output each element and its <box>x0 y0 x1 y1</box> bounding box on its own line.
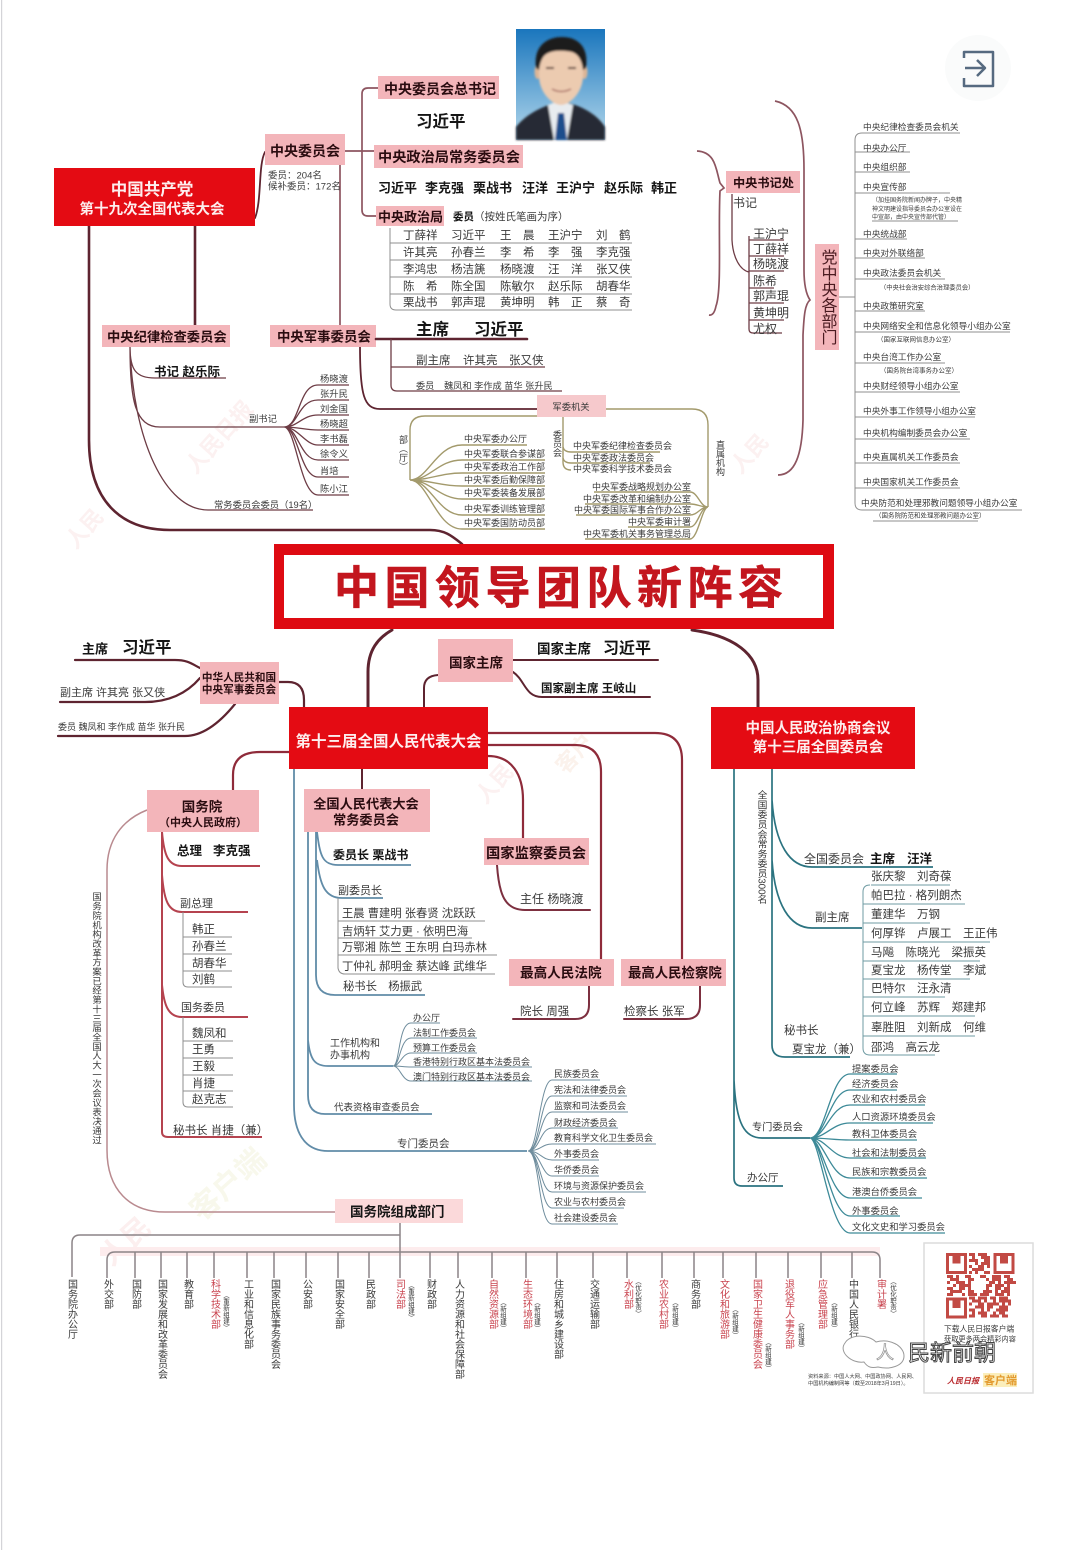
panel: 全国人大常委会: 监察和司法委员会 <box>554 1100 626 1111</box>
panel: 国务院: 肖捷 <box>192 1076 215 1090</box>
panel: 全国人大常委会: 代表资格审查委员会 <box>334 1101 420 1113</box>
panel: 军委机关 tree <box>398 395 725 539</box>
source note: 中国机构编制网等（截至2018年3月19日）。 <box>808 1379 909 1387</box>
panel: 中央政治局 members table: 赵乐际 <box>548 279 582 293</box>
panel: 中央政治局 members table: 胡春华 <box>596 279 630 293</box>
list: 党中央各部门 departments: 中央政策研究室 <box>863 300 924 311</box>
panel: 中央政治局 members table: 孙春兰 <box>451 246 486 259</box>
panel: 军委机关 tree: 中央军委联合参谋部 <box>464 448 545 459</box>
panel: 全国政协委员会: 副主席 <box>815 910 850 924</box>
panel: 第十三届全国人民代表大会 <box>289 707 488 769</box>
panel: 中央纪律检查委员会: 常务委员会委员（19名） <box>214 499 317 510</box>
panel: 国务院: 国务院机构改革方案已经第十三届全国人大一次会议表决通过 <box>91 892 102 1144</box>
panel: 中央军事委员会: 魏凤和 李作成 苗华 张升民 <box>444 380 553 391</box>
panel: 国务院组成部门: （新组建） <box>498 1299 507 1332</box>
panel: 中央纪律检查委员会 <box>102 325 349 510</box>
heading: 中央委员会总书记: 习近平 <box>416 112 466 131</box>
panel: 中国人民政治协商会议 <box>711 707 915 769</box>
panel: 全国政协委员会: 外事委员会 <box>852 1205 898 1216</box>
list: 党中央各部门 departments: 中央台湾工作办公室 <box>863 351 942 362</box>
panel: 中央政治局 members table: 李 强 <box>548 245 583 259</box>
panel: 最高人民检察院: 检察长 张军 <box>624 1004 685 1018</box>
panel: 全国人大常委会: 环境与资源保护委员会 <box>554 1180 644 1191</box>
faint watermarks: 人民 <box>95 1211 157 1272</box>
panel: 国务院组成部门: （新组建） <box>830 1299 838 1332</box>
panel: 国务院: 刘鹤 <box>192 972 215 986</box>
panel: 中央政治局 members table: 刘 鹤 <box>596 228 630 242</box>
panel: 中央书记处: 王沪宁 <box>753 226 789 241</box>
panel: 全国人大常委会: 专门委员会 <box>397 1137 450 1150</box>
panel: 全国人大常委会: 秘书长 杨振武 <box>343 979 422 993</box>
panel: 中央政治局 members table: 栗战书 <box>403 296 438 309</box>
list: 党中央各部门 departments: 中央办公厅 <box>863 142 907 153</box>
panel: 全国人大常委会: 万鄂湘 陈竺 王东明 白玛赤林 <box>342 940 487 954</box>
list: 党中央各部门 departments: 中央纪律检查委员会机关 <box>863 121 959 132</box>
panel: 国务院组成部门: （优化职责） <box>634 1278 642 1317</box>
faint watermarks: 客户 <box>551 729 599 778</box>
panel: 全国人大常委会: 澳门特别行政区基本法委员会 <box>413 1071 530 1082</box>
panel: 全国政协委员会: 邵鸿 高云龙 <box>871 1040 940 1054</box>
panel: 国务院组成部门: （新组建） <box>670 1299 679 1332</box>
panel: 中央纪律检查委员会: 肖培 <box>320 465 339 476</box>
panel: 中央政治局 members table: 黄坤明 <box>500 295 534 309</box>
panel: 全国政协委员会: 夏宝龙 杨传堂 李斌 <box>871 963 986 977</box>
QR code card: 人民日报 <box>947 1376 980 1385</box>
panel: 中央政治局常务委员会: 汪洋 <box>522 180 548 195</box>
panel: 中央政治局常务委员会: 李克强 <box>425 180 464 195</box>
panel: 中华人民共和国中央军事委员会: 主席 <box>82 641 108 656</box>
panel: 国务院组成部门: 农业农村部 <box>656 1278 668 1330</box>
panel: 全国人大常委会: 副委员长 <box>338 884 382 897</box>
panel: 国家监察委员会 <box>484 838 590 910</box>
list: 党中央各部门 departments: （中央社会治安综合治理委员会） <box>880 282 974 291</box>
panel: 最高人民检察院: 最高人民检察院 <box>628 964 722 980</box>
panel: 全国政协委员会: 教科卫体委员会 <box>852 1128 917 1139</box>
panel: 中华人民共和国中央军事委员会 <box>58 638 304 736</box>
list: 党中央各部门 departments: 中央国家机关工作委员会 <box>863 476 959 487</box>
panel: 全国人大常委会: 华侨委员会 <box>554 1164 599 1175</box>
panel: 中央纪律检查委员会: 张升民 <box>320 389 348 399</box>
panel: 全国人大常委会: 办公厅 <box>413 1012 440 1023</box>
panel: 中华人民共和国中央军事委员会: 副主席 许其亮 张又侠 <box>60 685 165 699</box>
panel: 全国人大常委会: 社会建设委员会 <box>554 1212 617 1223</box>
QR code card: 客户端 <box>984 1373 1017 1387</box>
panel: 军委机关 tree: 中央军委改革和编制办公室 <box>583 493 691 504</box>
icon: QR code <box>947 1254 1016 1317</box>
panel: 全国人大常委会: 委员长 栗战书 <box>333 847 408 862</box>
panel: 国务院组成部门: 国务院组成部门 <box>350 1203 444 1219</box>
panel: 国务院: 赵克志 <box>192 1092 226 1106</box>
panel: 全国人大常委会: 吉炳轩 艾力更 · 依明巴海 <box>342 924 468 938</box>
panel: 国家监察委员会: 主任 杨晓渡 <box>520 891 583 906</box>
list: 党中央各部门 departments: 中宣部，由中央宣传部代管） <box>872 213 950 221</box>
panel: 中央政治局常务委员会: 栗战书 <box>473 180 512 195</box>
list: 党中央各部门 departments: 中央网络安全和信息化领导小组办公室 <box>863 320 1011 331</box>
panel: 国家主席: 国家副主席 王岐山 <box>541 681 636 695</box>
panel: 国务院组成部门: （新组建） <box>796 1319 805 1352</box>
panel: 中央政治局 members table: 郭声琨 <box>451 295 486 309</box>
panel: 国务院组成部门: 生态环境部 <box>520 1278 532 1330</box>
panel: 中央书记处: 郭声琨 <box>753 289 789 303</box>
panel: 中央委员会 <box>265 134 345 192</box>
panel: 军委机关 tree: 委员会 <box>552 429 562 458</box>
panel: 国务院组成部门: （重新组建） <box>406 1282 415 1321</box>
panel: 国务院组成部门: 国家民族事务委员会 <box>268 1279 280 1370</box>
panel: 国务院组成部门: （新组建） <box>730 1306 739 1338</box>
panel: 中华人民共和国中央军事委员会: 中华人民共和国 <box>202 671 276 684</box>
panel: 国家主席: 国家主席 <box>537 640 591 656</box>
panel: 中央政治局 members table: 杨晓渡 <box>500 262 535 276</box>
source note: 资料来源：中国人大网、中国政协网、人民网、 <box>808 1372 917 1380</box>
panel: 国务院组成部门: （重新组建） <box>222 1292 230 1331</box>
panel: 国务院组成部门: 国务院办公厅 <box>66 1279 78 1339</box>
panel: 中央纪律检查委员会: 书记 赵乐际 <box>154 364 220 379</box>
title banner <box>274 544 834 629</box>
panel: 中央政治局 members table: 蔡 奇 <box>596 296 630 309</box>
panel: 中央政治局 members table: 陈全国 <box>451 279 486 293</box>
brace: 党中央各部门 <box>775 101 810 475</box>
panel: 中央政治局 members table <box>376 206 632 310</box>
panel: 全国政协委员会: 文化文史和学习委员会 <box>852 1221 945 1232</box>
panel: 中华人民共和国中央军事委员会: 中央军事委员会 <box>202 683 276 696</box>
panel: 全国人大常委会: 丁仲礼 郝明金 蔡达峰 武维华 <box>342 959 487 973</box>
panel: 国务院: 国务委员 <box>181 1001 225 1014</box>
panel: 国务院组成部门: （新组建） <box>764 1339 772 1372</box>
panel: 国务院: 孙春兰 <box>192 940 226 953</box>
panel: 中央政治局 members table: 李鸿忠 <box>403 262 438 276</box>
panel: 中央军事委员会: 中央军事委员会 <box>277 328 371 344</box>
panel: 军委机关 tree: 中央军委政法委员会 <box>573 452 654 463</box>
panel: 中华人民共和国中央军事委员会: 习近平 <box>122 638 172 657</box>
faint watermarks: 人民 <box>471 759 519 808</box>
panel: 国务院 <box>91 790 335 1212</box>
panel: 中央纪律检查委员会: 中央纪律检查委员会 <box>107 328 227 344</box>
QR code card: 获取更多两会精彩内容 <box>944 1334 1016 1343</box>
panel: 国务院组成部门 <box>66 1199 897 1380</box>
panel: 中央政治局 members table: 陈敏尔 <box>500 279 534 293</box>
panel: 国家主席: 国家主席 <box>449 654 503 670</box>
panel: 全国人大常委会: 工作机构和 <box>330 1036 380 1049</box>
panel: 军委机关 tree: 部（厅） <box>398 434 408 471</box>
panel: 国家监察委员会: 国家监察委员会 <box>486 844 586 862</box>
panel: 国务院组成部门: 住房和城乡建设部 <box>552 1278 564 1360</box>
panel: 国务院组成部门: （优化职责） <box>888 1278 897 1317</box>
source note <box>808 1372 917 1387</box>
heading: 中央委员会总书记: 中央委员会总书记 <box>384 81 496 97</box>
panel: 全国政协委员会: 马飚 陈晓光 梁振英 <box>871 945 986 959</box>
panel: 中央政治局 members table: 丁薛祥 <box>403 228 438 242</box>
list: 党中央各部门 departments: 中央对外联络部 <box>863 247 924 258</box>
panel: 军委机关 tree: 中央军委国防动员部 <box>464 517 545 528</box>
list: 党中央各部门 departments: 中央直属机关工作委员会 <box>863 451 959 462</box>
panel: 军委机关 tree: 直属机构 <box>715 439 725 477</box>
panel: 全国政协委员会: 夏宝龙（兼） <box>792 1042 861 1056</box>
panel: 国务院组成部门: 中国人民银行 <box>846 1278 858 1340</box>
panel: 中央军事委员会: 许其亮 <box>463 353 498 367</box>
list: 党中央各部门 departments: 中央外事工作领导小组办公室 <box>863 405 976 416</box>
panel: 中央纪律检查委员会: 李书磊 <box>320 433 348 444</box>
panel: 国务院: 韩正 <box>192 922 215 936</box>
panel: 全国人大常委会: 常务委员会 <box>333 811 399 827</box>
panel: 全国人大常委会: 外事委员会 <box>554 1148 599 1159</box>
panel: 国务院: 胡春华 <box>192 956 226 970</box>
panel: 党中央各部门 <box>815 244 839 350</box>
panel: 国务院组成部门: 交通运输部 <box>588 1278 600 1330</box>
panel: 全国政协委员会: 专门委员会 <box>752 1120 803 1133</box>
panel: 全国政协委员会: 经济委员会 <box>852 1078 898 1089</box>
list: 党中央各部门 departments: 中央宣传部 <box>863 181 907 192</box>
panel: 最高人民法院: 最高人民法院 <box>520 964 602 980</box>
panel: 军委机关 tree: 中央军委办公厅 <box>464 433 527 444</box>
panel: 国务院组成部门: 国家安全部 <box>332 1279 344 1330</box>
panel: 军委机关 tree: 中央军委科学技术委员会 <box>573 463 672 474</box>
panel: 全国人大常委会 <box>294 769 656 1224</box>
panel: 国务院组成部门: 财政部 <box>424 1278 436 1310</box>
panel: 国务院组成部门: （新组建） <box>532 1299 541 1332</box>
panel: 中央军事委员会: 委员 <box>416 380 434 391</box>
panel: 全国政协委员会: 汪洋 <box>907 851 933 866</box>
panel: 全国人大常委会: 民族委员会 <box>554 1068 599 1079</box>
panel: 中央政治局 members table: （按姓氏笔画为序） <box>474 210 568 223</box>
panel: 中央委员会: 委员：204名 <box>268 169 322 181</box>
panel: 全国人大常委会: 办事机构 <box>330 1048 370 1061</box>
panel: 国务院组成部门: 水利部 <box>622 1279 634 1310</box>
list: 党中央各部门 departments: 神文明建设指导委员会办公室设在 <box>872 205 962 213</box>
panel: 国务院组成部门: 科学技术部 <box>208 1278 220 1330</box>
panel: 全国政协委员会: 港澳台侨委员会 <box>852 1186 917 1197</box>
panel: 中央政治局常务委员会: 中央政治局常务委员会 <box>378 149 520 166</box>
panel: 中央政治局 members table: 中央政治局 <box>378 209 443 224</box>
panel: 国务院组成部门: 工业和信息化部 <box>242 1279 254 1350</box>
WeChat account watermark: 人 <box>876 1343 894 1363</box>
panel: 中央政治局 members table: 韩 正 <box>548 295 582 309</box>
panel: 全国政协委员会: 民族和宗教委员会 <box>852 1166 926 1177</box>
WeChat account watermark <box>843 1336 996 1368</box>
panel: 国务院组成部门: 民政部 <box>364 1279 376 1310</box>
panel: 中央政治局 members table: 许其亮 <box>403 245 438 259</box>
panel: 国务院: 秘书长 肖捷（兼） <box>173 1123 268 1137</box>
panel: 全国政协委员会: 办公厅 <box>747 1171 778 1184</box>
faint watermarks: 人民 <box>61 504 109 553</box>
panel: 军委机关 tree: 军委机关 <box>552 401 590 412</box>
panel: 最高人民法院 <box>509 959 614 1019</box>
panel: 国务院组成部门: 退役军人事务部 <box>782 1279 794 1350</box>
panel: 全国人大常委会: 香港特别行政区基本法委员会 <box>413 1056 530 1067</box>
QR code card: 下载人民日报客户端 <box>944 1323 1014 1333</box>
panel: 中央纪律检查委员会: 陈小江 <box>320 483 348 494</box>
panel: 中央纪律检查委员会: 杨晓渡 <box>320 373 348 384</box>
panel: 中央书记处: 尤权 <box>753 322 777 336</box>
portrait photo <box>516 29 605 140</box>
panel: 国务院组成部门: 国家发展和改革委员会 <box>156 1279 168 1380</box>
panel: 中央政治局 members table: 习近平 <box>451 229 486 242</box>
panel: 全国政协委员会: 提案委员会 <box>852 1063 898 1074</box>
panel: 全国政协委员会: 何厚铧 卢展工 王正伟 <box>871 926 998 940</box>
panel: 国务院: 副总理 <box>180 896 213 910</box>
panel: 中央政治局 members table: 李克强 <box>596 245 631 259</box>
panel: 国务院: 李克强 <box>213 843 251 858</box>
panel: 军委机关 tree: 中央军委训练管理部 <box>464 503 545 514</box>
panel: 全国人大常委会: 预算工作委员会 <box>413 1042 476 1053</box>
list: 党中央各部门 departments <box>839 121 1022 521</box>
panel: 全国政协委员会: 农业和农村委员会 <box>852 1093 926 1104</box>
panel: 国务院组成部门: 司法部 <box>394 1279 406 1310</box>
connectors: 全国人大 branches <box>233 733 682 959</box>
panel: 中国共产党第十九次全国代表大会: 中国共产党 <box>111 180 193 199</box>
panel: 全国政协委员会 <box>734 769 998 1233</box>
panel: 全国政协委员会: 巴特尔 汪永清 <box>871 981 952 995</box>
panel: 中央委员会: 候补委员：172名 <box>268 180 341 192</box>
panel: 中国共产党第十九次全国代表大会 <box>54 168 255 226</box>
panel: 全国政协委员会: 秘书长 <box>784 1023 819 1037</box>
faint watermarks <box>61 396 880 1272</box>
panel: 国务院组成部门: 应急管理部 <box>816 1278 828 1330</box>
panel: 全国人大常委会: 农业与农村委员会 <box>554 1196 626 1207</box>
panel: 中央政治局常务委员会: 韩正 <box>651 180 677 195</box>
panel: 中国共产党第十九次全国代表大会: 第十九次全国代表大会 <box>80 200 225 218</box>
panel: 国务院组成部门: 自然资源部 <box>486 1278 498 1330</box>
panel: 中央纪律检查委员会: 副书记 <box>249 413 277 424</box>
panel: 军委机关 tree: 中央军委政治工作部 <box>464 461 545 472</box>
panel: 党中央各部门: 党中央各部门 <box>818 249 838 346</box>
panel: 全国人大常委会: 王晨 曹建明 张春贤 沈跃跃 <box>342 906 476 920</box>
panel: 中央军事委员会: 习近平 <box>474 320 524 339</box>
panel: 中央政治局 members table: 张又侠 <box>596 263 631 276</box>
title banner: 中国领导团队新阵容 <box>334 562 789 613</box>
panel: 全国政协委员会: 董建华 万钢 <box>871 907 940 921</box>
panel: 中央军事委员会: 主席 <box>416 319 449 339</box>
list: 党中央各部门 departments: 中央防范和处理邪教问题领导小组办公室 <box>861 497 1018 508</box>
panel: 军委机关 tree: 中央军委国际军事合作办公室 <box>574 504 691 515</box>
panel: 中国人民政治协商会议: 中国人民政治协商会议 <box>746 719 891 737</box>
list: 党中央各部门 departments: 中央政法委员会机关 <box>863 267 942 278</box>
panel: 中央纪律检查委员会: 杨晓超 <box>320 418 348 429</box>
panel: 全国人大常委会: 教育科学文化卫生委员会 <box>554 1132 653 1143</box>
panel: 国务院: 王勇 <box>192 1043 215 1056</box>
panel: 中央政治局 members table: 李 希 <box>500 245 534 259</box>
panel: 国务院: 总理 <box>177 843 203 858</box>
panel: 国务院组成部门: 教育部 <box>182 1278 194 1310</box>
panel: 中国人民政治协商会议: 第十三届全国委员会 <box>753 738 884 756</box>
panel: 中央政治局 members table: 陈 希 <box>403 279 438 293</box>
list: 党中央各部门 departments: （国务院台湾事务办公室） <box>880 365 958 374</box>
QR code card <box>924 1243 1033 1393</box>
panel: 全国政协委员会: 何立峰 苏辉 郑建邦 <box>871 1000 986 1014</box>
list: 党中央各部门 departments: 中央机构编制委员会办公室 <box>863 427 968 438</box>
panel: 全国政协委员会: 张庆黎 刘奇葆 <box>871 869 952 883</box>
panel: 全国政协委员会: 全国委员会 <box>804 851 864 866</box>
panel: 中央政治局 members table: 汪 洋 <box>548 262 583 276</box>
panel: 全国人大常委会: 法制工作委员会 <box>413 1027 476 1038</box>
panel: 国务院组成部门: 国防部 <box>130 1279 142 1310</box>
panel: 中央政治局 members table: 杨洁篪 <box>451 262 486 276</box>
panel: 国务院: （中央人民政府） <box>159 815 247 829</box>
list: 党中央各部门 departments: 中央组织部 <box>863 161 907 172</box>
list: 党中央各部门 departments: （国务院防范和处理邪教问题办公室） <box>875 510 986 519</box>
panel: 中央政治局 members table: 王 晨 <box>500 229 535 242</box>
panel: 军委机关 tree: 中央军委审计署 <box>628 516 691 527</box>
panel: 国务院组成部门: 外交部 <box>102 1279 114 1310</box>
panel: 中央书记处 <box>726 171 800 336</box>
panel: 最高人民法院: 院长 周强 <box>520 1004 570 1018</box>
main connector lines <box>89 88 758 707</box>
panel: 全国政协委员会: 社会和法制委员会 <box>852 1147 926 1158</box>
panel: 国务院组成部门: 文化和旅游部 <box>718 1278 730 1340</box>
panel: 国家主席: 习近平 <box>603 639 651 657</box>
panel: 中央政治局常务委员会: 习近平 <box>378 180 417 195</box>
panel: 全国人大常委会: 全国人民代表大会 <box>313 795 419 811</box>
panel: 国务院组成部门: 人力资源和社会保障部 <box>452 1279 464 1380</box>
faint watermarks: 人民 <box>726 429 774 478</box>
panel: 中央纪律检查委员会: 徐令义 <box>320 448 348 459</box>
panel: 全国政协委员会: 全国委员会常务委员300名 <box>756 789 767 905</box>
heading: 中央委员会总书记 <box>378 76 499 131</box>
panel: 中央军事委员会 <box>270 319 562 409</box>
panel: 国务院: 王毅 <box>192 1059 215 1073</box>
panel: 中央委员会: 中央委员会 <box>270 143 340 159</box>
panel: 中央书记处: 黄坤明 <box>753 305 789 320</box>
panel: 国务院组成部门: 审计署 <box>874 1278 886 1309</box>
panel: 军委机关 tree: 中央军委纪律检查委员会 <box>573 440 672 451</box>
panel: 全国人大常委会: 财政经济委员会 <box>554 1117 617 1128</box>
faint watermarks: 人民日报 <box>181 396 258 478</box>
panel: 军委机关 tree: 中央军委装备发展部 <box>464 487 545 498</box>
panel: 中央政治局 members table: 王沪宁 <box>548 228 582 242</box>
panel: 中央书记处: 书记 <box>733 196 757 210</box>
panel: 全国政协委员会: 帕巴拉 · 格列朗杰 <box>871 888 962 902</box>
panel: 中央书记处: 中央书记处 <box>733 175 794 190</box>
panel: 中央政治局常务委员会 <box>374 145 677 195</box>
list: 党中央各部门 departments: （加挂国务院新闻办牌子，中央精 <box>872 196 962 204</box>
panel: 军委机关 tree: 中央军委机关事务管理总局 <box>583 528 691 539</box>
panel: 中央书记处: 丁薛祥 <box>753 242 789 256</box>
panel: 全国政协委员会: 辜胜阻 刘新成 何维 <box>871 1020 986 1034</box>
panel: 中华人民共和国中央军事委员会: 委员 魏凤和 李作成 苗华 张升民 <box>58 721 185 732</box>
WeChat account watermark: 民新前朝 <box>908 1340 996 1365</box>
list: 党中央各部门 departments: 中央财经领导小组办公室 <box>863 380 959 391</box>
panel: 中央书记处: 陈希 <box>753 273 777 288</box>
panel: 全国政协委员会: 主席 <box>870 851 895 866</box>
panel: 国务院: 国务院 <box>182 798 223 814</box>
panel: 中央政治局常务委员会: 王沪宁 <box>556 180 595 195</box>
panel: 中央书记处: 杨晓渡 <box>753 256 789 271</box>
panel: 军委机关 tree: 中央军委后勤保障部 <box>464 474 545 485</box>
panel: 军委机关 tree: 中央军委战略规划办公室 <box>592 481 691 492</box>
panel: 国务院组成部门: 国家卫生健康委员会 <box>750 1279 762 1370</box>
panel: 国家主席 <box>438 639 651 695</box>
faint watermarks: 客户端 <box>184 1143 273 1227</box>
panel: 全国人大常委会: 宪法和法律委员会 <box>554 1084 626 1095</box>
brace: 常务委员会 to 书记处 <box>697 151 724 315</box>
panel: 国务院组成部门: 公安部 <box>300 1279 312 1310</box>
icon: exit button <box>945 35 1011 101</box>
panel: 中央政治局常务委员会: 赵乐际 <box>604 180 643 195</box>
panel: 国务院组成部门: 商务部 <box>688 1278 700 1310</box>
panel: 最高人民检察院 <box>621 959 726 1019</box>
panel: 全国政协委员会: 人口资源环境委员会 <box>852 1111 936 1122</box>
list: 党中央各部门 departments: （国家互联网信息办公室） <box>877 334 955 343</box>
panel: 中央军事委员会: 张又侠 <box>509 354 544 367</box>
panel: 国务院: 魏凤和 <box>192 1026 226 1040</box>
panel: 中央军事委员会: 副主席 <box>416 353 450 367</box>
panel: 中央政治局 members table: 委员 <box>453 210 474 223</box>
panel: 中央纪律检查委员会: 刘金国 <box>320 403 348 414</box>
list: 党中央各部门 departments: 中央统战部 <box>863 228 907 239</box>
panel: 第十三届全国人民代表大会: 第十三届全国人民代表大会 <box>295 731 482 750</box>
